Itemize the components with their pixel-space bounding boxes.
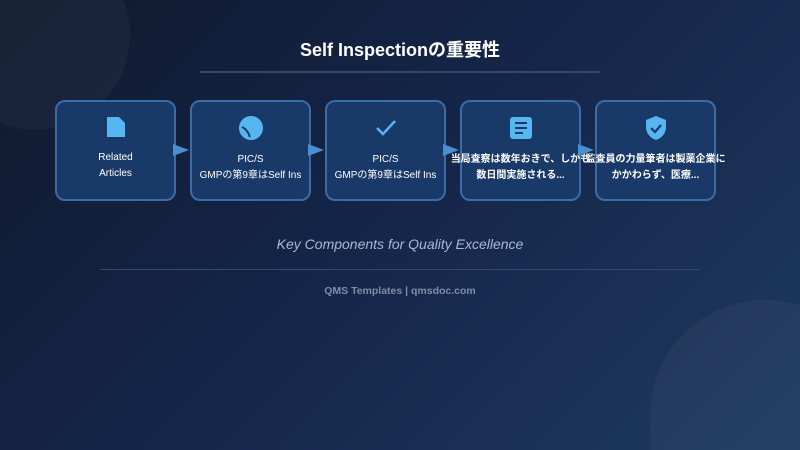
- arrow 4: [578, 144, 594, 156]
- icon: check: [376, 120, 396, 136]
- card 1: Related: [98, 152, 133, 163]
- card 2: PIC/S: [237, 154, 264, 165]
- icon: list: [510, 117, 532, 139]
- card 1: Articles: [99, 168, 132, 179]
- card 5: 監査員の力量筆者は製薬企業に: [586, 154, 726, 165]
- footer: QMS Templates | qmsdoc.com: [324, 285, 476, 297]
- subtitle: Key Components for Quality Excellence: [277, 236, 523, 252]
- card 3: PIC/S: [372, 154, 399, 165]
- card 4: 数日間実施される...: [476, 170, 565, 181]
- card 3: GMPの第9章はSelf Ins: [335, 170, 436, 181]
- icon: document: [107, 117, 125, 137]
- card 5: [595, 100, 716, 201]
- card 3: [325, 100, 446, 201]
- card 2: GMPの第9章はSelf Ins: [200, 170, 301, 181]
- arrow 1: [173, 144, 189, 156]
- title: Self Inspectionの重要性: [300, 40, 500, 60]
- arrow 3: [443, 144, 459, 156]
- icon: circle: [239, 116, 263, 140]
- card 2: [190, 100, 311, 201]
- arrow 2: [308, 144, 324, 156]
- icon: shield: [646, 116, 666, 140]
- card 4: 当局査察は数年おきで、しかも: [451, 154, 590, 165]
- card 1: [55, 100, 176, 201]
- card 5: かかわらず、医療...: [612, 170, 699, 181]
- card 4: [460, 100, 581, 201]
